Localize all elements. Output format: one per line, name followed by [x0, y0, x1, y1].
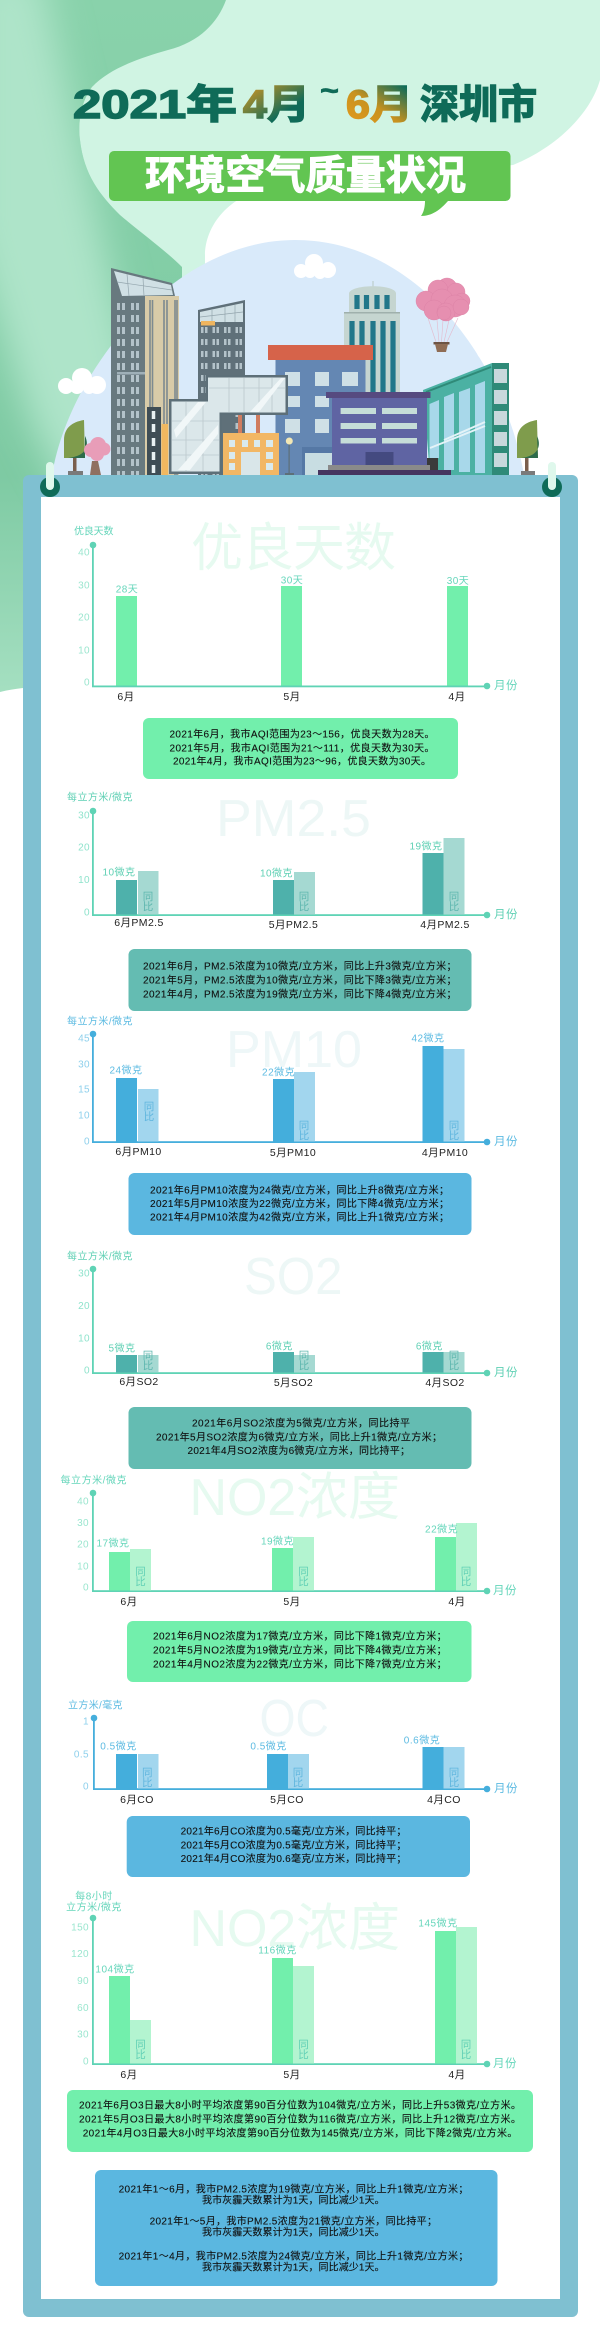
- bars: [116, 586, 468, 686]
- year-on-year labels: 同: [461, 2039, 471, 2051]
- month labels: 5月PM10: [270, 1147, 316, 1159]
- value labels: 30天: [447, 576, 469, 587]
- teal building: [423, 363, 509, 475]
- chart: PM10: [67, 1014, 518, 1159]
- month labels: [119, 1376, 465, 1389]
- year-on-year labels: 同: [143, 891, 153, 903]
- value labels: 116微克: [258, 1944, 297, 1956]
- ticks: 40: [78, 548, 90, 558]
- pink tree: [84, 437, 110, 475]
- value labels: 0.6微克: [404, 1734, 440, 1746]
- chart: SO2: [67, 1248, 518, 1389]
- purple building: [318, 392, 451, 475]
- ticks: [78, 1268, 90, 1376]
- axes: [91, 1715, 490, 1792]
- month labels: 4月PM2.5: [420, 919, 470, 931]
- callout: PM10: 2021年6月PM10浓度为24微克/立方米，同比上升8微克/立方米；: [150, 1184, 449, 1196]
- ticks: [74, 1716, 89, 1792]
- value labels: [109, 1032, 445, 1078]
- year-on-year labels: 同: [144, 1101, 154, 1113]
- callout: NO2: 2021年4月NO2浓度为22微克/立方米，同比下降7微克/立方米；: [153, 1658, 447, 1670]
- year-on-year labels: 比: [293, 1776, 303, 1789]
- value labels: 145微克: [418, 1916, 458, 1930]
- value labels: 10微克: [102, 866, 136, 878]
- ticks: 0.5: [74, 1750, 89, 1760]
- watermark: OC: [260, 1690, 329, 1748]
- callout: NO2: 2021年5月NO2浓度为19微克/立方米，同比下降4微克/立方米；: [153, 1644, 447, 1656]
- month labels: 6月: [117, 691, 135, 703]
- year-on-year labels: [143, 891, 459, 913]
- blue building: [268, 345, 373, 475]
- ticks: 1: [83, 1716, 89, 1728]
- ticks: 40: [77, 1496, 89, 1508]
- main title: ~: [320, 74, 339, 108]
- axis title: 每立方米/微克: [67, 1250, 133, 1262]
- year-on-year labels: 同: [299, 891, 309, 903]
- month labels: 5月SO2: [274, 1377, 313, 1389]
- value labels: 10微克: [260, 866, 293, 880]
- value labels: 0.5微克: [100, 1740, 137, 1752]
- bars: [116, 1747, 444, 1788]
- value labels: 28天: [116, 584, 138, 596]
- year-on-year labels: 同: [299, 1350, 309, 1362]
- callout: NO2: [127, 1621, 472, 1682]
- year-on-year labels: 比: [144, 1110, 154, 1123]
- tower C: [344, 281, 400, 393]
- axes: [90, 1031, 490, 1145]
- axes: [90, 1266, 490, 1376]
- watermark: SO2: [244, 1248, 342, 1306]
- year-on-year labels: 同: [449, 1350, 459, 1362]
- month labels: 6月: [120, 2069, 138, 2081]
- year-on-year labels: [143, 1350, 459, 1372]
- right tree: [517, 420, 539, 475]
- year-on-year labels: [135, 2039, 471, 2061]
- year-on-year labels: 同: [143, 1350, 153, 1362]
- ticks: 0: [83, 1582, 89, 1594]
- year-on-year labels: 比: [461, 1575, 471, 1588]
- month labels: 5月: [283, 2069, 301, 2081]
- axis title: [66, 1890, 122, 1914]
- month labels: 4月SO2: [425, 1377, 465, 1389]
- year-on-year labels: [135, 1566, 471, 1588]
- chart: CO: [68, 1690, 518, 1806]
- watermark: 优良天数: [191, 520, 396, 578]
- month labels: 4月CO: [427, 1794, 461, 1806]
- ticks: [77, 1496, 89, 1594]
- hot air balloon: [416, 278, 470, 352]
- year-on-year bars: [130, 1523, 477, 1590]
- month labels: 6月: [120, 1596, 138, 1608]
- callout: PM2.5: 2021年4月，PM2.5浓度为19微克/立方米，同比下降4微克/立方米；: [143, 988, 456, 1000]
- year-on-year labels: 比: [135, 1575, 146, 1588]
- month labels: [120, 2069, 466, 2081]
- callout: PM10: 2021年4月PM10浓度为42微克/立方米，同比上升1微克/立方米；: [150, 1210, 449, 1224]
- year-on-year labels: 同: [293, 1767, 303, 1779]
- ticks: 30: [78, 580, 90, 592]
- year-on-year bars: [138, 838, 464, 914]
- x-axis title: 月份: [494, 1782, 518, 1795]
- bars: [116, 1352, 444, 1372]
- value labels: [96, 1522, 458, 1550]
- ticks: 10: [78, 875, 90, 886]
- main title: 4月: [243, 83, 310, 127]
- ticks: 20: [77, 1540, 89, 1550]
- year-on-year labels: 同: [449, 1767, 459, 1779]
- year-on-year bars: [138, 1747, 464, 1788]
- callout: SO2: 2021年4月SO2浓度为6微克/立方米，同比持平；: [188, 1444, 410, 1457]
- value labels: [102, 840, 443, 880]
- month labels: 4月: [448, 691, 466, 703]
- value labels: [100, 1734, 440, 1752]
- value labels: 5微克: [108, 1342, 136, 1354]
- callout: O3: 2021年4月O3日最大8小时平均浓度第90百分位数为145微克/立方米，同比下降2微克/立方米。: [83, 2126, 517, 2140]
- month labels: 4月PM10: [422, 1147, 468, 1159]
- year-on-year labels: 同: [298, 2039, 309, 2051]
- value labels: 6微克: [416, 1340, 443, 1352]
- callout: O3: [67, 2090, 533, 2152]
- month labels: 6月CO: [120, 1794, 154, 1806]
- ticks: 20: [78, 1301, 90, 1312]
- axis title: 每立方米/微克: [60, 1474, 127, 1486]
- axis title: 每立方米/微克: [67, 1014, 133, 1028]
- axis title: 每8小时: [75, 1890, 113, 1902]
- callout: PM10: [128, 1173, 472, 1235]
- axes: [90, 808, 490, 918]
- month labels: 6月PM10: [115, 1146, 162, 1158]
- chart: PM2.5: [67, 790, 518, 931]
- ticks: 0: [83, 1782, 89, 1792]
- ticks: 15: [78, 1084, 90, 1096]
- year-on-year bars: [130, 1927, 477, 2064]
- chart: O3: [66, 1890, 517, 2081]
- x-axis title: 月份: [494, 1366, 518, 1379]
- ticks: 30: [78, 1060, 90, 1070]
- ticks: [78, 810, 90, 918]
- callout: SO2: 2021年6月SO2浓度为5微克/立方米，同比持平: [192, 1416, 410, 1430]
- callout: year-to-date summary: 我市灰霾天数累计为1天，同比减少1天。: [202, 2194, 385, 2206]
- value labels: 24微克: [109, 1064, 143, 1076]
- year-on-year labels: 比: [299, 1359, 309, 1372]
- month labels: 5月: [283, 1596, 301, 1608]
- year-on-year bars: [138, 1049, 464, 1142]
- callout: SO2: 2021年5月SO2浓度为6微克/立方米，同比上升1微克/立方米；: [156, 1430, 442, 1444]
- main title: 6月: [346, 83, 413, 127]
- callout: good-air days: 2021年4月，我市AQI范围为23～96，优良天数为30天。: [173, 754, 431, 768]
- value labels: [116, 576, 469, 596]
- value labels: 6微克: [266, 1340, 293, 1352]
- subtitle banner: [109, 151, 510, 216]
- main title: [73, 74, 537, 127]
- callout: CO: 2021年5月CO浓度为0.5毫克/立方米，同比持平；: [181, 1838, 406, 1852]
- year-on-year labels: 同: [461, 1566, 471, 1578]
- year-on-year labels: 同: [135, 2039, 146, 2051]
- watermark: PM2.5: [216, 790, 371, 848]
- year-on-year labels: 比: [449, 900, 459, 913]
- year-on-year labels: 比: [449, 1129, 459, 1142]
- chart: NO2: [60, 1469, 517, 1608]
- value labels: 17微克: [96, 1536, 130, 1550]
- ticks: 10: [78, 1334, 90, 1344]
- callout: PM2.5: 2021年5月，PM2.5浓度为10微克/立方米，同比下降3微克/立方米；: [143, 974, 456, 986]
- month labels: 6月SO2: [119, 1376, 159, 1388]
- axis title: 每立方米/微克: [67, 790, 133, 804]
- callout: year-to-date summary: [95, 2170, 498, 2286]
- ticks: 20: [78, 612, 90, 624]
- ticks: 10: [78, 1110, 90, 1122]
- panel: main frame: [23, 475, 578, 2317]
- axes: [90, 542, 490, 689]
- background: green wave: [0, 0, 240, 700]
- sky dome: [52, 240, 524, 475]
- watermark: NO2浓度: [190, 1469, 400, 1527]
- ticks: 30: [78, 1268, 90, 1280]
- ticks: [71, 1922, 89, 2068]
- bars: [116, 1046, 444, 1142]
- year-on-year labels: 比: [135, 2048, 146, 2061]
- street lamp: [285, 438, 294, 475]
- value labels: 19微克: [261, 1534, 294, 1548]
- x-axis title: 月份: [494, 679, 518, 692]
- callout: good-air days: [143, 718, 458, 779]
- watermark: NO2浓度: [190, 1900, 400, 1958]
- left tree: [64, 420, 87, 475]
- year-on-year labels: 比: [299, 900, 309, 913]
- year-on-year labels: 同: [449, 891, 459, 903]
- glass building: [169, 375, 288, 474]
- value labels: 30天: [281, 576, 303, 586]
- month labels: [120, 1794, 461, 1806]
- year-on-year labels: 比: [449, 1776, 459, 1789]
- year-on-year labels: 同: [142, 1767, 153, 1779]
- ticks: 30: [78, 810, 90, 822]
- tower B: [198, 300, 245, 475]
- ticks: 60: [77, 2003, 89, 2014]
- month labels: [117, 691, 466, 703]
- value labels: 104微克: [95, 1962, 135, 1976]
- ticks: 45: [78, 1034, 90, 1044]
- ticks: 0: [84, 1366, 90, 1376]
- orange building: [223, 415, 279, 475]
- year-on-year labels: 比: [142, 1776, 153, 1789]
- month labels: [114, 917, 470, 931]
- background: mint blob: [60, 0, 600, 300]
- callout: good-air days: 2021年6月，我市AQI范围为23～156，优良天数为28天。: [170, 728, 434, 740]
- x-axis title: 月份: [493, 2057, 517, 2070]
- binder clips: [40, 462, 562, 497]
- axis title: 优良天数: [74, 524, 114, 538]
- ticks: 30: [77, 2030, 89, 2040]
- month labels: [115, 1146, 468, 1159]
- ticks: 150: [71, 1922, 89, 1934]
- x-axis title: 月份: [494, 908, 518, 921]
- ticks: 10: [77, 1562, 89, 1572]
- year-on-year labels: 比: [461, 2048, 471, 2061]
- callout: O3: 2021年5月O3日最大8小时平均浓度第90百分位数为116微克/立方米，同比上升12微克/立方米。: [79, 2112, 521, 2126]
- value labels: 0.5微克: [250, 1740, 287, 1752]
- callout: PM2.5: 2021年6月，PM2.5浓度为10微克/立方米，同比上升3微克/立方米；: [143, 960, 456, 972]
- callout: PM10: 2021年5月PM10浓度为22微克/立方米，同比下降4微克/立方米；: [150, 1197, 449, 1210]
- value labels: 22微克: [425, 1522, 458, 1536]
- axes: [90, 1490, 490, 1594]
- value labels: [108, 1340, 443, 1354]
- callout: NO2: 2021年6月NO2浓度为17微克/立方米，同比下降1微克/立方米；: [153, 1630, 447, 1642]
- axis title: 立方米/毫克: [68, 1698, 123, 1712]
- ticks: 0: [83, 2056, 89, 2068]
- year-on-year labels: 比: [143, 900, 153, 913]
- axes: [90, 1915, 490, 2067]
- ticks: [78, 1034, 90, 1148]
- clouds: [58, 254, 503, 394]
- callout: year-to-date summary: 2021年1～4月，我市PM2.5浓度为24微克/立方米，同比上升1微克/立方米；: [119, 2250, 468, 2262]
- year-on-year labels: 比: [449, 1359, 459, 1372]
- ticks: 0: [84, 908, 90, 918]
- callout: year-to-date summary: 2021年1～5月，我市PM2.5浓度为21微克/立方米，同比持平；: [150, 2214, 437, 2228]
- year-on-year bars: [138, 1352, 464, 1372]
- watermark: PM10: [226, 1021, 362, 1079]
- bars: [109, 1931, 456, 2064]
- month labels: 6月PM2.5: [114, 917, 164, 929]
- callout: SO2: [128, 1407, 472, 1469]
- ticks: 30: [77, 1518, 89, 1529]
- bars: [109, 1537, 456, 1590]
- callout: year-to-date summary: 2021年1～6月，我市PM2.5浓度为19微克/立方米，同比上升1微克/立方米；: [119, 2182, 468, 2196]
- value labels: [95, 1916, 458, 1976]
- year-on-year labels: 同: [298, 1566, 309, 1578]
- illustration: city skyline: [52, 240, 539, 475]
- year-on-year labels: 比: [143, 1359, 153, 1372]
- year-on-year labels: 比: [298, 2048, 309, 2061]
- month labels: 4月: [448, 2069, 466, 2081]
- year-on-year labels: 同: [449, 1120, 459, 1132]
- callout: CO: 2021年4月CO浓度为0.6毫克/立方米，同比持平；: [181, 1852, 406, 1865]
- month labels: 5月CO: [270, 1794, 304, 1806]
- year-on-year labels: 比: [299, 1129, 309, 1142]
- ticks: [78, 548, 90, 688]
- year-on-year labels: 同: [135, 1566, 146, 1578]
- main title: 深圳市: [420, 83, 537, 127]
- month labels: 4月: [448, 1596, 466, 1608]
- ticks: 10: [78, 646, 90, 656]
- x-axis title: 月份: [494, 1135, 518, 1148]
- callout: PM2.5: [128, 949, 472, 1011]
- callout: good-air days: 2021年5月，我市AQI范围为21～111，优良天数为30天。: [170, 742, 434, 754]
- ticks: 120: [71, 1949, 89, 1960]
- ticks: 0: [84, 678, 90, 688]
- main title: 2021年: [73, 83, 237, 127]
- year-on-year labels: 比: [298, 1575, 309, 1588]
- month labels: [120, 1596, 466, 1608]
- axis title: 立方米/微克: [66, 1900, 122, 1914]
- callout: CO: 2021年6月CO浓度为0.5毫克/立方米，同比持平；: [181, 1824, 406, 1838]
- tower A: [111, 268, 179, 475]
- value labels: 19微克: [409, 840, 443, 852]
- callout: CO: [127, 1816, 470, 1877]
- month labels: 5月: [283, 691, 301, 703]
- ticks: 0: [84, 1136, 90, 1148]
- value labels: 22微克: [262, 1066, 295, 1078]
- callout: year-to-date summary: 我市灰霾天数累计为1天，同比减少1天。: [202, 2260, 385, 2274]
- value labels: 42微克: [411, 1032, 445, 1044]
- year-on-year labels: [144, 1101, 459, 1142]
- callout: O3: 2021年6月O3日最大8小时平均浓度第90百分位数为104微克/立方米，同比上升53微克/立方米。: [79, 2098, 521, 2112]
- year-on-year labels: [142, 1767, 459, 1789]
- callout: year-to-date summary: 我市灰霾天数累计为1天，同比减少1天。: [202, 2226, 385, 2238]
- ticks: 20: [78, 842, 90, 854]
- year-on-year labels: 同: [299, 1120, 309, 1132]
- x-axis title: 月份: [493, 1584, 517, 1597]
- month labels: 5月PM2.5: [269, 919, 318, 931]
- bars: [116, 853, 444, 914]
- ticks: 90: [77, 1976, 89, 1987]
- subtitle banner: 环境空气质量状况: [145, 154, 466, 198]
- chart: good-air days: [74, 520, 518, 703]
